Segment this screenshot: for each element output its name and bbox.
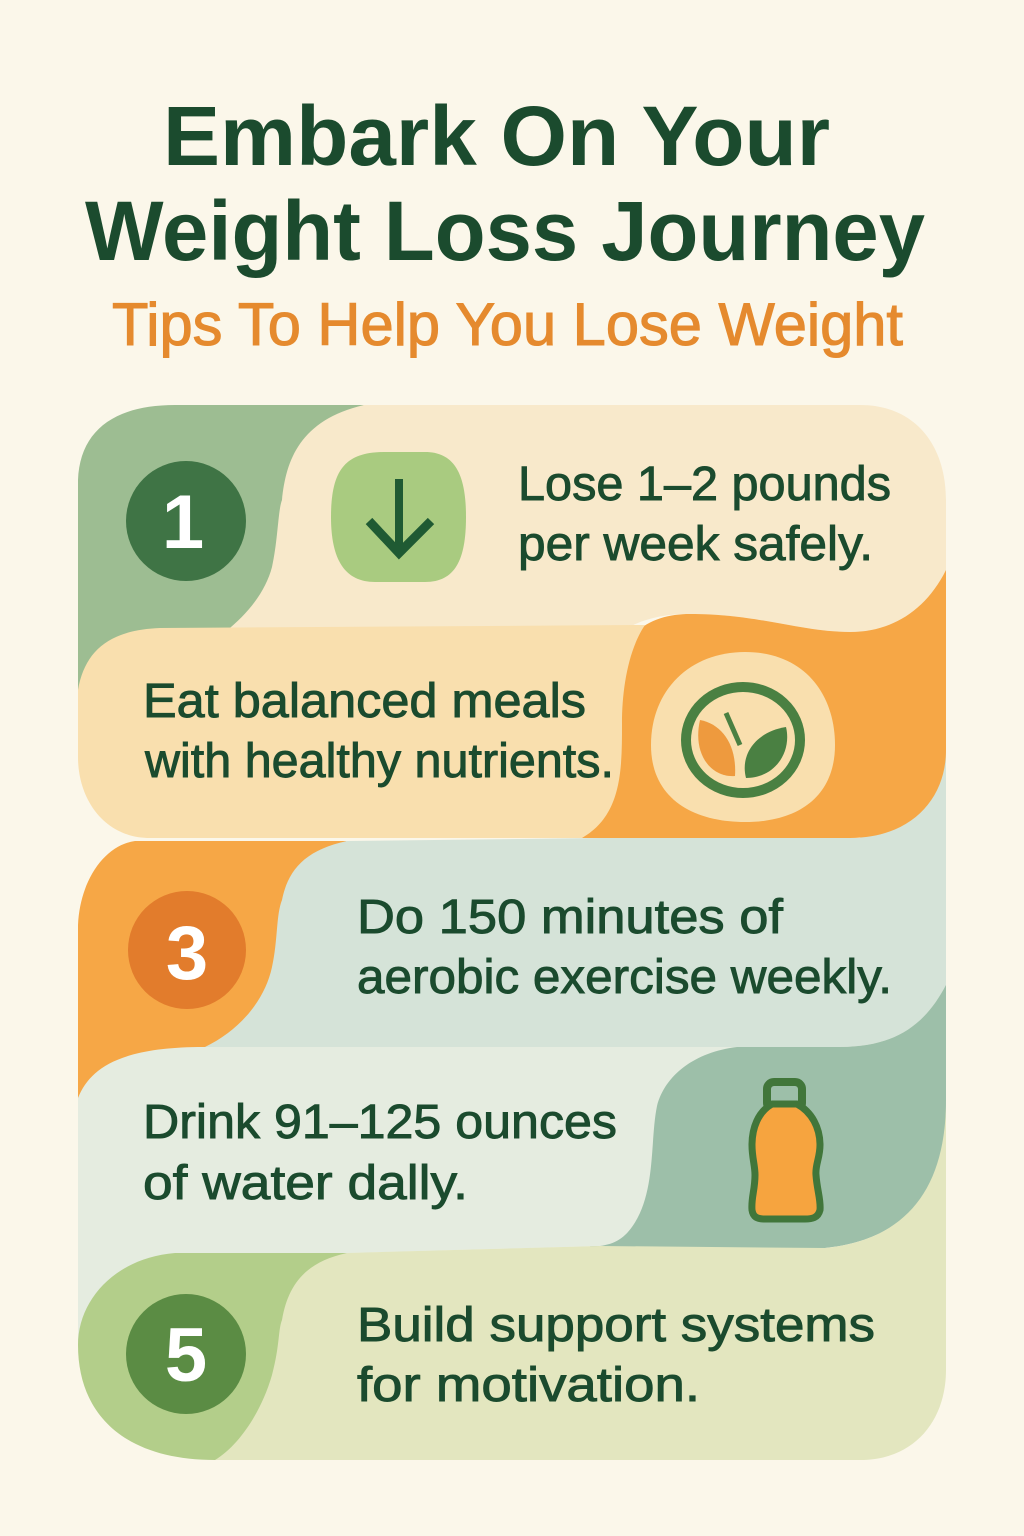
step 1 text: per week safely. xyxy=(518,518,873,571)
step 3 text: aerobic exercise weekly. xyxy=(357,951,892,1004)
icon: plate with leaves xyxy=(651,652,835,822)
step 2 text: Eat balanced meals xyxy=(143,675,586,728)
icon: step 5 badge xyxy=(126,1294,246,1414)
panel: step 5 number tab xyxy=(78,1253,347,1460)
icon: step 3 badge xyxy=(128,891,246,1009)
icon: water bottle xyxy=(752,1082,820,1219)
panel: step 4 xyxy=(78,1047,820,1345)
panel: step 3 number tab xyxy=(78,841,347,1100)
step 4 text: of water dally. xyxy=(143,1157,468,1210)
title: Embark On Your xyxy=(163,89,830,183)
panel: step 2 xyxy=(78,625,835,838)
step 1 text: Lose 1–2 pounds xyxy=(518,458,891,511)
title xyxy=(85,89,925,278)
step 3 numeral: 3 xyxy=(166,911,208,996)
icon: step 1 badge xyxy=(126,461,246,581)
step 5 text: for motivation. xyxy=(357,1359,700,1412)
step 5 text xyxy=(357,1299,875,1412)
panel: step 2 icon tab xyxy=(582,570,946,838)
step 2 text xyxy=(143,675,614,788)
panel: step 5 background xyxy=(215,1100,946,1460)
step 1 text xyxy=(518,458,891,571)
icon: down arrow xyxy=(331,452,466,582)
step 1 numeral: 1 xyxy=(162,480,204,565)
step 5 text: Build support systems xyxy=(357,1299,875,1352)
subtitle: Tips To Help You Lose Weight xyxy=(112,291,903,358)
step 3 text: Do 150 minutes of xyxy=(357,891,784,944)
title: Weight Loss Journey xyxy=(85,184,925,278)
panel: step 1 number tab xyxy=(78,405,364,700)
step 5 numeral: 5 xyxy=(165,1313,207,1398)
panel: mint backing of step 3 xyxy=(600,740,946,1000)
step 4 text xyxy=(143,1096,617,1210)
step 4 text: Drink 91–125 ounces xyxy=(143,1096,617,1149)
step 3 text xyxy=(357,891,892,1004)
panel: step 1 xyxy=(126,405,946,632)
panel: step 3 xyxy=(128,838,946,1047)
step 2 text: with healthy nutrients. xyxy=(144,735,614,788)
panel: step 4 icon tab xyxy=(590,985,946,1248)
